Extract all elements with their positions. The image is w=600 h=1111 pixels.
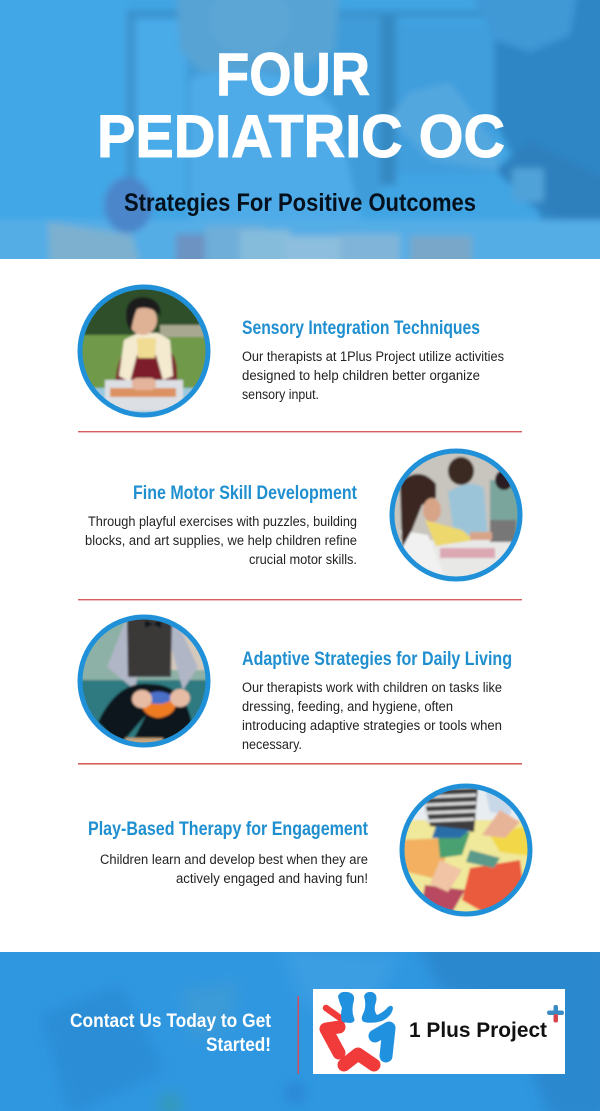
text: play-based therapy: actively engaged and having fun! (176, 871, 368, 886)
photo: children with modelling clay (390, 449, 522, 585)
header banner (0, 0, 600, 270)
text: adaptive strategies (242, 680, 502, 752)
text: adaptive strategies: introducing adaptive strategies or tools when (242, 718, 502, 733)
footer band (0, 940, 600, 1111)
photo: boy with rainbow fidget toy (78, 615, 210, 750)
photo: child playing in sensory bin (78, 285, 210, 418)
logo wordmark: 1 Plus Project (409, 1018, 547, 1042)
text: sensory integration: sensory input. (242, 387, 319, 402)
title: PEDIATRIC OC (97, 103, 505, 170)
text: fine motor: Through playful exercises with puzzles, building (88, 514, 357, 529)
logo plus sign (547, 1005, 564, 1022)
text: fine motor (85, 514, 357, 567)
text: adaptive strategies: necessary. (242, 737, 302, 752)
heading: play-based therapy: Play-Based Therapy for Engagement (88, 818, 368, 840)
logo mark (326, 992, 393, 1065)
heading: fine motor: Fine Motor Skill Development (133, 482, 357, 504)
call to action: Started! (206, 1035, 271, 1056)
title: FOUR (216, 41, 370, 108)
text: fine motor: blocks, and art supplies, we help children refine (85, 533, 357, 548)
text: sensory integration: Our therapists at 1Plus Project utilize activities (242, 349, 504, 364)
call to action (70, 1011, 272, 1056)
heading: adaptive strategies: Adaptive Strategies for Daily Living (242, 648, 512, 670)
text: play-based therapy (100, 852, 368, 886)
photo: colored paper craft (400, 784, 532, 916)
text: fine motor: crucial motor skills. (249, 552, 357, 567)
subtitle: Strategies For Positive Outcomes (124, 189, 476, 217)
text: sensory integration: designed to help children better organize (242, 368, 480, 383)
text: adaptive strategies: Our therapists work with children on tasks like (242, 680, 502, 695)
heading: sensory integration: Sensory Integration Techniques (242, 317, 480, 339)
text: sensory integration (242, 349, 504, 402)
title (97, 41, 505, 170)
call to action: Contact Us Today to Get (70, 1011, 272, 1032)
text: adaptive strategies: dressing, feeding, and hygiene, often (242, 699, 453, 714)
text: play-based therapy: Children learn and develop best when they are (100, 852, 368, 867)
logo: 1 Plus Project (313, 989, 565, 1074)
